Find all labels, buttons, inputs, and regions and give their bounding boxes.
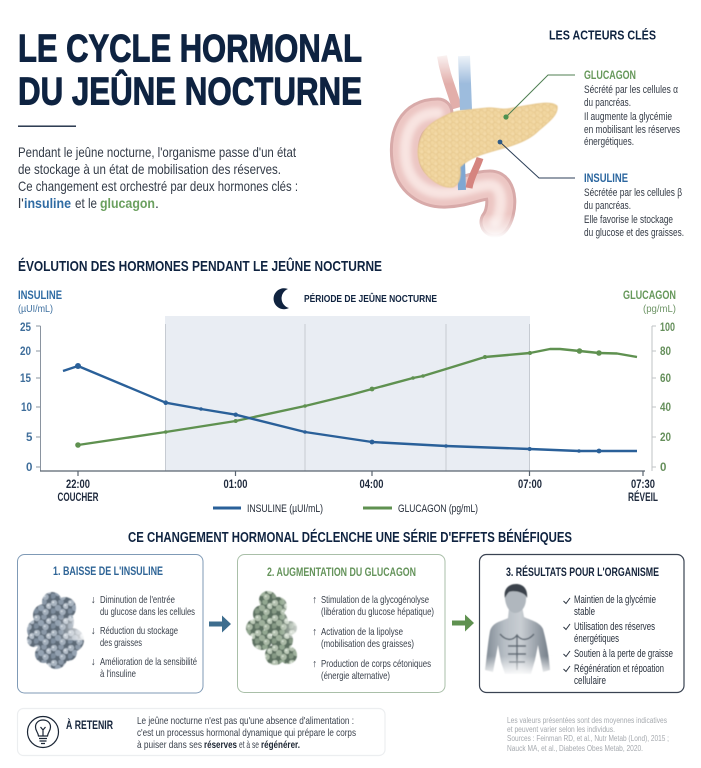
intro text: glucagon (100, 195, 155, 211)
footnote: sources: Nauck MA, et al., Diabetes Obes Metab, 2020. (507, 744, 643, 753)
title: DU JEÛNE NOCTURNE (18, 68, 362, 114)
series: insuline (63, 363, 637, 453)
lower vessels (461, 158, 480, 190)
list: Régénération et répoation (574, 663, 664, 675)
axis title: glucagon: (pg/mL) (643, 303, 676, 315)
illustration: pancreas with duodenum and vessels (405, 50, 575, 238)
night band (165, 316, 530, 471)
intro text: de stockage à un état de mobilisation des réserves. (18, 161, 281, 177)
x axis: 01:00 (224, 479, 248, 491)
message: réserves (204, 739, 237, 751)
series: glucagon (75, 348, 637, 448)
illustration: male torso (482, 584, 554, 676)
right axis (652, 322, 675, 474)
legend: INSULINE (µUI/mL) (247, 503, 323, 515)
right axis: 80 (660, 346, 671, 358)
text block: insuline: INSULINE (584, 171, 628, 185)
icon: light bulb (28, 716, 58, 748)
message: régénérer. (261, 739, 300, 751)
list: des graisses (100, 637, 142, 649)
panel title: 1. BAISSE DE L'INSULINE (53, 564, 163, 578)
list: (mobilisation des graisses) (321, 638, 414, 650)
intro text: Ce changement est orchestré par deux hormones clés : (18, 178, 298, 194)
list: ↓ (90, 594, 96, 606)
list (90, 594, 197, 680)
list: cellulaire (574, 675, 606, 687)
footnote: sources: Sources : Feinman RD, et al., Nutr Metab (Lond), 2015 ; (507, 734, 669, 743)
left axis: 20 (20, 346, 31, 358)
panel: résultats pour l'organisme (480, 554, 684, 692)
list: ↑ (312, 626, 317, 638)
title: LE CYCLE HORMONAL (18, 28, 362, 70)
text block: insuline (584, 171, 684, 239)
message (137, 715, 356, 751)
text block: glucagon (584, 68, 680, 148)
panel: baisse de l'insuline (18, 554, 203, 693)
message: et à se (239, 739, 259, 751)
x axis: COUCHER (58, 492, 99, 504)
arrow: insuline to glucagon (209, 616, 231, 632)
arrow: glucagon to results (452, 614, 474, 632)
x axis: 07:30 (631, 479, 655, 491)
list: (énergie alternative) (321, 670, 390, 682)
intro text: l' (18, 195, 24, 211)
text block: insuline: du pancréas. (584, 200, 631, 212)
night period label: PÉRIODE DE JEÛNE NOCTURNE (304, 292, 437, 305)
left axis: 15 (20, 373, 32, 385)
message: Le jeûne nocturne n'est pas qu'une absence d'alimentation : (137, 715, 354, 727)
heading: effects section: CE CHANGEMENT HORMONAL DÉCLENCHE UNE SÉRIE D'EFFETS BÉNÉFIQUES (128, 529, 572, 546)
right axis: 20 (660, 432, 671, 444)
list: énergétiques (574, 633, 619, 645)
footnote: sources: et peuvent varier selon les individus. (507, 725, 615, 734)
x axis: 07:00 (518, 479, 542, 491)
duodenum (405, 113, 520, 238)
left axis: 0 (26, 462, 32, 474)
leader: glucagon (503, 75, 575, 120)
x axis: RÉVEIL (628, 491, 658, 504)
icon: insulin molecule (27, 592, 86, 669)
list: ↓ (90, 625, 96, 637)
leader: insuline (498, 140, 575, 178)
axis title: insuline (18, 290, 62, 315)
footnote: sources: Les valeurs présentées sont des moyennes indicatives (507, 716, 667, 725)
heading: les acteurs clés: LES ACTEURS CLÉS (549, 28, 656, 42)
axis title: glucagon (623, 290, 676, 315)
left axis: 5 (26, 432, 33, 444)
message: c'est un processus hormonal dynamique qui prépare le corps (137, 727, 356, 739)
list: Utilisation des réserves (574, 621, 655, 633)
icon: glucagon molecule (246, 591, 302, 665)
intro text: Pendant le jeûne nocturne, l'organisme passe d'un état (18, 144, 296, 160)
left axis (20, 322, 40, 474)
left axis: 10 (21, 402, 32, 414)
axis title: glucagon: GLUCAGON (623, 290, 676, 302)
heading: chart section: ÉVOLUTION DES HORMONES PENDANT LE JEÛNE NOCTURNE (18, 257, 382, 275)
text block: glucagon: GLUCAGON (584, 68, 636, 82)
legend (213, 503, 478, 515)
callout: à retenir (18, 708, 385, 756)
left axis: 25 (20, 322, 32, 334)
x axis: 04:00 (360, 479, 384, 491)
icon: moon (274, 288, 289, 309)
panel title: 2. AUGMENTATION DU GLUCAGON (267, 565, 416, 579)
panel: augmentation du glucagon (238, 554, 445, 692)
message: à puiser dans ses (137, 739, 202, 751)
list: Amélioration de la sensibilité (100, 656, 197, 668)
axis title: insuline: (µUI/mL) (18, 303, 53, 315)
footnote: sources (507, 716, 669, 753)
list: ↓ (90, 656, 96, 668)
intro text: . (155, 195, 159, 211)
intro text: et le (75, 195, 97, 211)
legend: GLUCAGON (pg/mL) (398, 503, 478, 515)
pancreas (418, 103, 557, 187)
list: Activation de la lipolyse (321, 626, 403, 638)
x axis (40, 471, 658, 504)
right axis: 40 (660, 402, 671, 414)
title (18, 28, 362, 114)
list (564, 594, 673, 687)
line chart (18, 288, 676, 515)
right axis: 100 (660, 322, 675, 334)
list: ↑ (312, 658, 317, 670)
text block: glucagon: du pancréas. (584, 97, 631, 109)
text block: glucagon: énergétiques. (584, 136, 634, 148)
list: Production de corps cétoniques (321, 658, 431, 670)
intro text (18, 144, 298, 211)
list: Diminution de l'entrée (100, 594, 175, 606)
list: Stimulation de la glycogénolyse (321, 594, 429, 606)
intro text: insuline (24, 195, 71, 211)
list: ↑ (312, 594, 317, 606)
upper vessels (430, 50, 482, 110)
axis title: insuline: INSULINE (18, 290, 62, 302)
list: Maintien de la glycémie (574, 594, 656, 606)
band dividers (166, 324, 530, 471)
list: (libération du glucose hépatique) (321, 606, 434, 618)
text block: insuline: Elle favorise le stockage (584, 214, 673, 226)
text block: glucagon: Il augmente la glycémie (584, 111, 672, 123)
list: du glucose dans les cellules (100, 606, 195, 618)
list: stable (574, 606, 595, 618)
list (312, 594, 434, 682)
list: à l'insuline (100, 668, 136, 680)
right axis: 0 (660, 462, 666, 474)
x axis: 22:00 (66, 479, 90, 491)
right axis: 60 (660, 373, 671, 385)
label: À RETENIR (66, 717, 113, 732)
list: Réduction du stockage (100, 625, 178, 637)
